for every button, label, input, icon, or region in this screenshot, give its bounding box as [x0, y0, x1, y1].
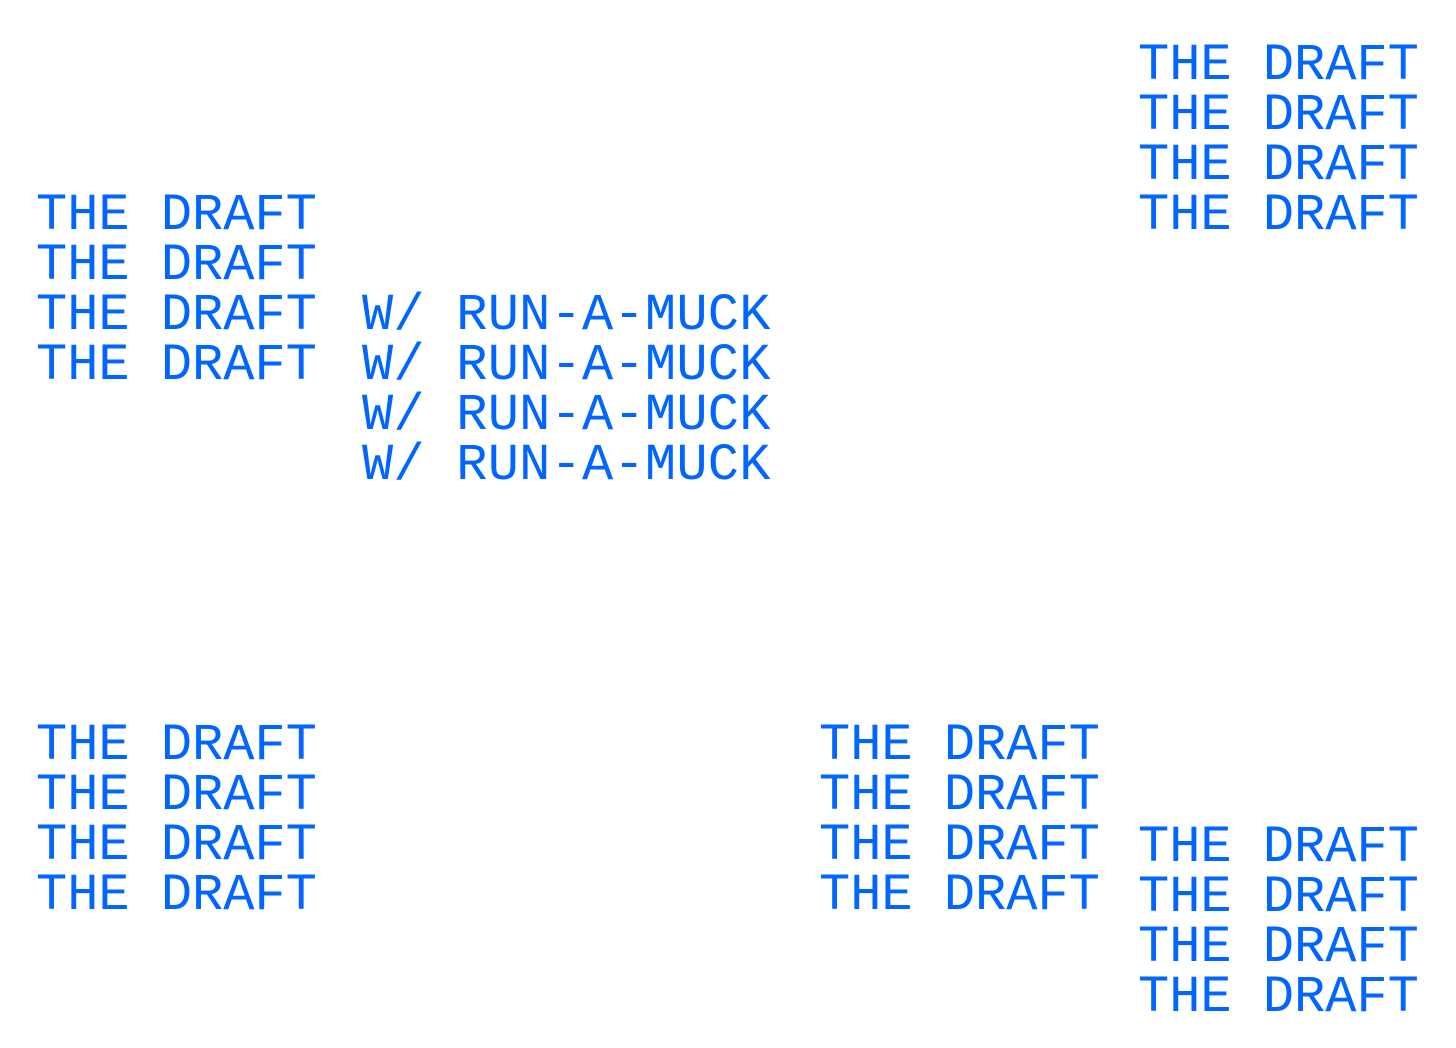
- text block: middle left: THE DRAFT THE DRAFT THE DRAFT THE DRAFT: [36, 186, 317, 395]
- text block: run-a-muck: W/ RUN-A-MUCK W/ RUN-A-MUCK W/ RUN-A-MUCK W/ RUN-A-MUCK: [362, 286, 771, 495]
- text block: bottom centre: THE DRAFT THE DRAFT THE DRAFT THE DRAFT: [819, 716, 1100, 925]
- text block: top right: THE DRAFT THE DRAFT THE DRAFT THE DRAFT: [1138, 36, 1419, 245]
- text block: bottom right: THE DRAFT THE DRAFT THE DRAFT THE DRAFT: [1138, 818, 1419, 1027]
- text block: bottom left: THE DRAFT THE DRAFT THE DRAFT THE DRAFT: [36, 716, 317, 925]
